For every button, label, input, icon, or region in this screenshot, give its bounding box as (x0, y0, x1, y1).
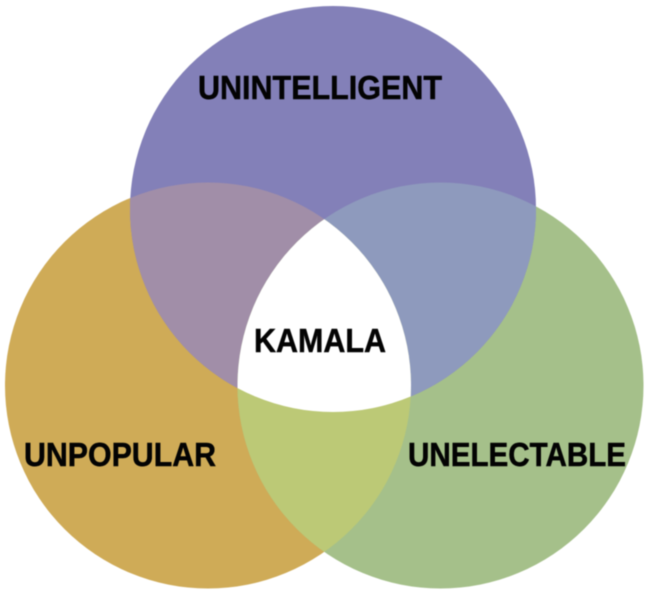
label: unelectable: UNELECTABLE (408, 436, 626, 473)
label: unpopular: UNPOPULAR (24, 436, 216, 473)
overlap: unintelligent and unpopular (130, 182, 324, 388)
overlap: unintelligent and unelectable (324, 182, 536, 396)
label: kamala: KAMALA (254, 322, 386, 359)
center overlap: white (236, 218, 412, 413)
overlap: unpopular and unelectable (238, 388, 411, 552)
circle: unpopular (5, 182, 411, 588)
label: unintelligent: UNINTELLIGENT (198, 69, 442, 106)
circle: unintelligent (130, 6, 536, 412)
circle: unelectable (238, 182, 644, 588)
